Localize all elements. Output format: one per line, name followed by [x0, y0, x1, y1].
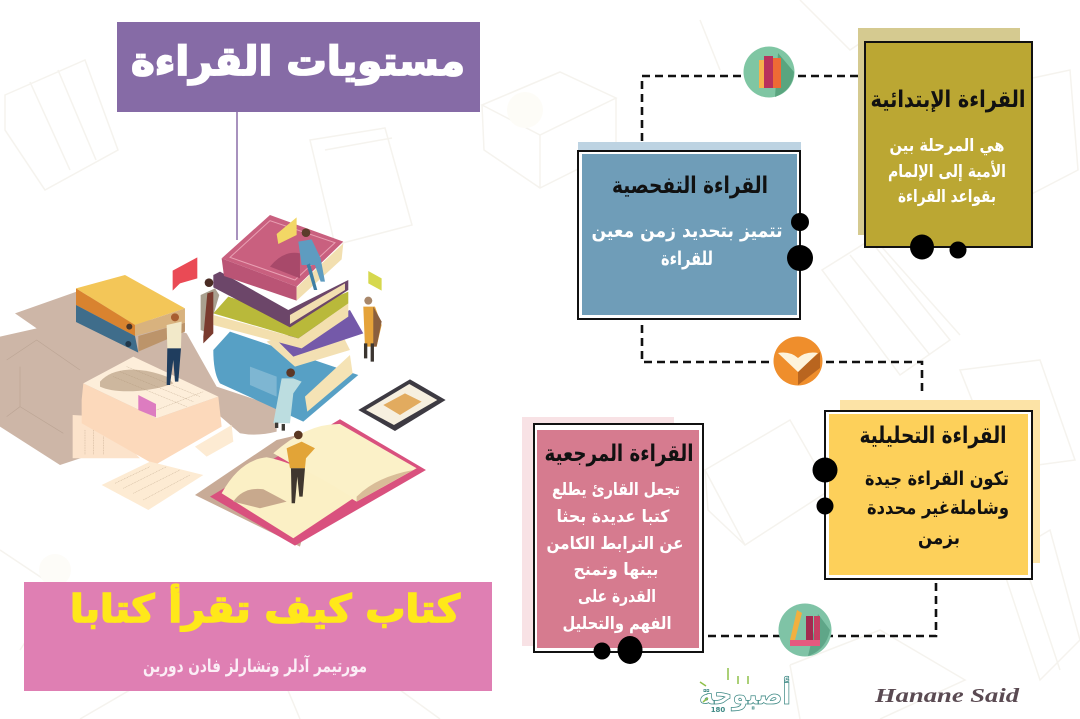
reference body: بينها وتمنح	[574, 560, 658, 580]
primary body	[888, 136, 1006, 207]
flags	[138, 217, 382, 417]
skimming body	[592, 220, 782, 270]
analytical body	[865, 468, 1009, 549]
analytical heading: القراءة التحليلية	[860, 423, 1006, 449]
olive book	[213, 292, 348, 348]
ground shadow	[0, 292, 277, 465]
logo: Osbouha: أصبوحة	[699, 676, 791, 711]
purple book	[267, 310, 363, 367]
black dots	[594, 213, 966, 664]
logo: Osbouha: 180	[711, 706, 725, 714]
person: man on paper stack	[167, 313, 182, 385]
primary body: بقواعد القراءة	[898, 187, 996, 207]
book title: كتاب كيف تقرأ كتابا	[70, 584, 461, 631]
skimming body: تتميز بتحديد زمن معين	[592, 220, 782, 242]
paper stack	[73, 357, 233, 510]
analytical body: بزمن	[918, 527, 960, 549]
primary heading: القراءة الإبتدائية	[870, 87, 1026, 113]
tablet	[358, 379, 446, 431]
pink top book	[222, 215, 343, 301]
panel: primary reading	[858, 28, 1032, 247]
reference body: عن الترابط الكامن	[546, 534, 684, 554]
connector: dashed line middle	[642, 325, 922, 396]
icon: open book circle	[774, 336, 822, 386]
title text: مستويات القراءة	[131, 39, 465, 85]
signature: Hanane Said	[874, 685, 1020, 707]
open book	[195, 419, 426, 547]
connector: dashed line top	[642, 76, 858, 148]
analytical body: تكون القراءة جيدة	[865, 468, 1009, 490]
book authors: مورتيمر آدلر وتشارلز فادن دورين	[143, 654, 367, 677]
icon: book row circle	[744, 46, 794, 98]
title banner	[117, 22, 480, 112]
connector: dashed line bottom	[704, 583, 936, 636]
binders	[76, 275, 185, 353]
reference body	[546, 480, 684, 634]
connector: vertical title line	[236, 112, 238, 240]
analytical body: وشاملةغير محددة	[867, 497, 1009, 519]
panel: skimming reading	[578, 142, 801, 319]
book banner	[24, 582, 492, 691]
person: seated man on pink book	[298, 228, 325, 290]
primary body: هي المرحلة بين	[890, 136, 1004, 156]
reference body: كتبا عديدة بحثا	[556, 507, 670, 527]
panel: analytical reading	[825, 400, 1040, 579]
skimming body: للقراءة	[661, 248, 713, 270]
logo: Osbouha	[699, 668, 791, 714]
blue bottom book	[213, 332, 358, 422]
person: hat man	[363, 297, 382, 362]
reference body: الفهم والتحليل	[562, 614, 672, 634]
reference heading: القراءة المرجعية	[544, 441, 694, 467]
primary body: الأمية إلى الإلمام	[888, 161, 1006, 182]
dark purple book	[213, 272, 348, 327]
person: man in robe	[273, 368, 302, 431]
person: man with coat	[201, 278, 219, 343]
reference body: القدرة على	[578, 587, 656, 607]
illustration: isometric books and readers	[0, 215, 446, 547]
skimming heading: القراءة التفحصية	[612, 173, 768, 199]
person: man on open book	[287, 431, 315, 503]
icon: microscope and books circle	[778, 604, 832, 656]
panel: reference reading	[522, 417, 703, 652]
reference body: تجعل القارئ يطلع	[552, 480, 680, 500]
